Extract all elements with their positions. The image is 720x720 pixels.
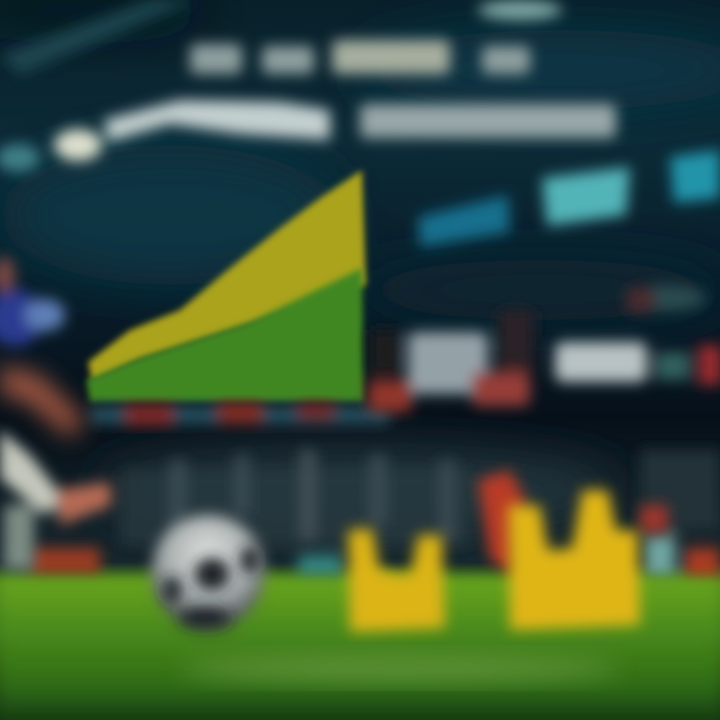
right side panels <box>368 285 720 412</box>
yellow bar chart right <box>508 490 640 630</box>
chart baseline strip <box>90 402 390 426</box>
area chart <box>86 170 366 402</box>
title: second line <box>0 100 616 172</box>
ball patches <box>163 547 259 628</box>
yellow bar chart left <box>348 528 445 632</box>
roof beam streak <box>0 0 195 75</box>
crowd in the stands <box>30 450 720 580</box>
chart: yellow area <box>88 170 366 382</box>
player: arm and shorts <box>0 365 85 438</box>
soccer ball <box>151 515 265 629</box>
player <box>0 257 112 570</box>
title: first line <box>190 0 562 74</box>
pitch highlight <box>180 655 620 681</box>
stadium roof and atmosphere <box>0 0 720 525</box>
player: leg <box>0 430 112 570</box>
grass pitch <box>0 578 720 720</box>
teal data tiles <box>418 150 720 247</box>
red flags behind bars <box>478 470 668 575</box>
player: jersey <box>0 257 65 346</box>
chart: green area <box>86 268 364 402</box>
